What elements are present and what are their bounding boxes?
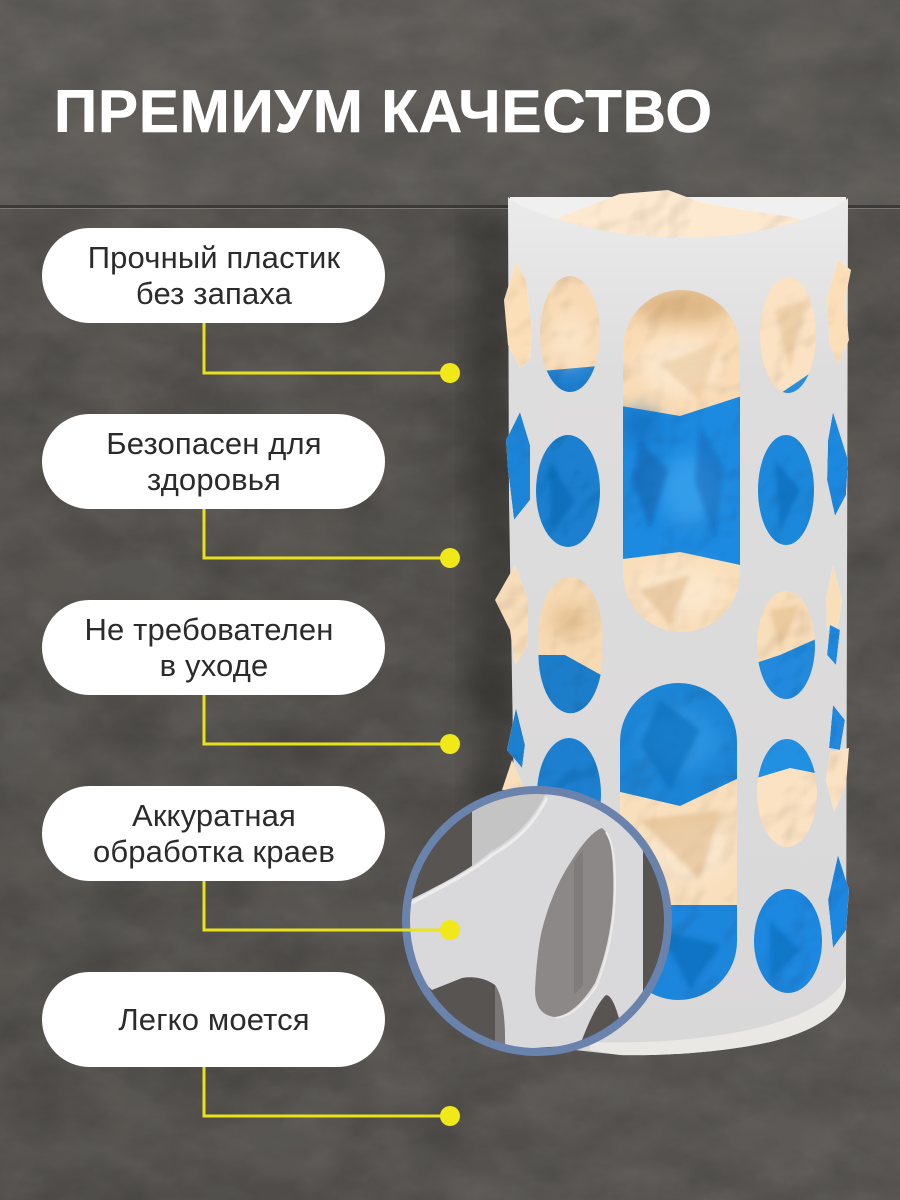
dispenser base rim	[590, 975, 846, 1055]
product: bag dispenser	[470, 190, 851, 1055]
callout 3: easy care: в уходе	[160, 648, 268, 683]
callout 1: durable plastic	[42, 228, 460, 383]
callout 4: neat edge finishing	[42, 786, 460, 940]
dispenser front wall with cut-out holes	[508, 197, 848, 1055]
callout 2: safe for health	[42, 414, 460, 568]
soft shading inside holes	[630, 287, 730, 323]
magnifier lens: edge detail	[400, 770, 668, 1052]
lens: back wall strip	[472, 794, 546, 866]
callout 5: easy to wash	[42, 972, 460, 1126]
bags spilling out of side holes	[495, 260, 851, 948]
callout 3: easy care: Не требователен	[84, 612, 334, 647]
dispenser back wall	[510, 197, 846, 245]
callout 3: easy care	[42, 600, 460, 754]
lens: light plastic surface	[410, 794, 643, 1048]
callout 4: neat edge finishing: обработка краев	[93, 834, 335, 869]
callout 1: durable plastic: Прочный пластик	[88, 240, 341, 275]
title: ПРЕМИУМ КАЧЕСТВО	[54, 78, 712, 145]
callout 2: safe for health: здоровья	[147, 462, 281, 497]
callout 1: durable plastic: без запаха	[136, 276, 293, 311]
bags inside dispenser	[530, 190, 828, 1005]
callout 5: easy to wash: Легко моется	[118, 1002, 310, 1037]
bag folds and highlights	[548, 300, 805, 990]
lens: oval hole	[535, 828, 613, 1017]
callout 4: neat edge finishing: Аккуратная	[132, 798, 296, 833]
callout 2: safe for health: Безопасен для	[106, 426, 322, 461]
